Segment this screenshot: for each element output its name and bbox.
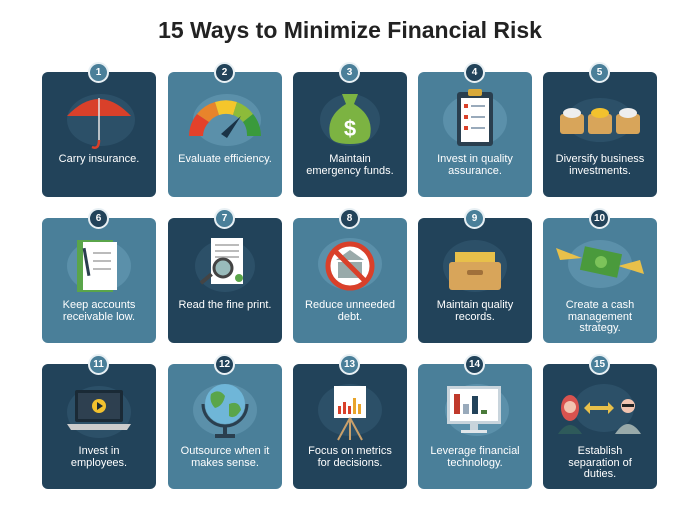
icon: globe — [193, 384, 257, 438]
card 3: emergency funds. — [306, 164, 394, 176]
icon: clipboard — [443, 89, 507, 146]
card 6 — [42, 218, 156, 343]
card 1: 1 — [96, 67, 101, 78]
card 6: receivable low. — [63, 310, 135, 322]
card 11: Invest in — [79, 445, 119, 457]
icon: monitor chart — [445, 384, 509, 436]
icon: gauge — [189, 94, 261, 146]
card 12: Outsource when it — [181, 445, 269, 457]
card 3: 3 — [347, 67, 352, 78]
icon: baskets — [560, 98, 640, 142]
icon: document — [67, 240, 131, 292]
icon: laptop — [67, 386, 131, 438]
card 9: 9 — [472, 213, 477, 224]
card 11 — [42, 364, 156, 489]
card 10 — [543, 218, 657, 343]
card 8: 8 — [347, 213, 352, 224]
card 10: 10 — [594, 213, 605, 224]
card 5: investments. — [569, 164, 631, 176]
card 6: Keep accounts — [63, 299, 135, 311]
card 11: 11 — [93, 359, 104, 370]
card 6: 6 — [96, 213, 101, 224]
icon: easel chart — [318, 384, 382, 440]
card 15: duties. — [584, 468, 616, 480]
card 4 — [418, 72, 532, 197]
card 8: Reduce unneeded — [305, 299, 395, 311]
icon: two people arrows — [558, 384, 641, 434]
card 2: 2 — [222, 67, 227, 78]
card 2 — [168, 72, 282, 197]
card 3: Maintain — [329, 153, 371, 165]
card 15 — [543, 364, 657, 489]
card 10: management — [568, 310, 632, 322]
icon: umbrella — [67, 94, 135, 149]
icon: no bank — [318, 238, 382, 290]
card 13: for decisions. — [318, 456, 382, 468]
card 7 — [168, 218, 282, 343]
card 5 — [543, 72, 657, 197]
card 7: Read the fine print. — [179, 299, 271, 311]
card 3 — [293, 72, 407, 197]
card 12: makes sense. — [191, 456, 259, 468]
card 1: Carry insurance. — [59, 153, 139, 165]
card 5: 5 — [597, 67, 602, 78]
icon: money bag — [320, 94, 380, 146]
card 4: assurance. — [448, 164, 502, 176]
title: 15 Ways to Minimize Financial Risk — [158, 17, 542, 43]
card 4: Invest in quality — [437, 153, 513, 165]
card 13: Focus on metrics — [308, 445, 392, 457]
card 13 — [293, 364, 407, 489]
card 9: Maintain quality — [437, 299, 513, 311]
card 10: strategy. — [579, 322, 621, 334]
card 15: separation of — [568, 456, 632, 468]
card 14 — [418, 364, 532, 489]
card 2: Evaluate efficiency. — [178, 153, 272, 165]
icon: drawer — [443, 240, 507, 292]
icon: money bag: $ — [344, 116, 356, 141]
icon: magnifier on paper — [195, 238, 255, 292]
card 9 — [418, 218, 532, 343]
card 8 — [293, 218, 407, 343]
card 12 — [168, 364, 282, 489]
card 9: records. — [455, 310, 495, 322]
card 14: 14 — [469, 359, 480, 370]
card 14: technology. — [447, 456, 503, 468]
card 10: Create a cash — [566, 299, 634, 311]
card 13: 13 — [344, 359, 355, 370]
card 12: 12 — [219, 359, 230, 370]
card 4: 4 — [472, 67, 477, 78]
card 15: Establish — [578, 445, 622, 457]
card 5: Diversify business — [556, 153, 644, 165]
card 1 — [42, 72, 156, 197]
icon: cash — [556, 240, 644, 288]
card 8: debt. — [338, 310, 362, 322]
card 7: 7 — [222, 213, 227, 224]
card 15: 15 — [594, 359, 605, 370]
card 14: Leverage financial — [430, 445, 520, 457]
card 11: employees. — [71, 456, 127, 468]
